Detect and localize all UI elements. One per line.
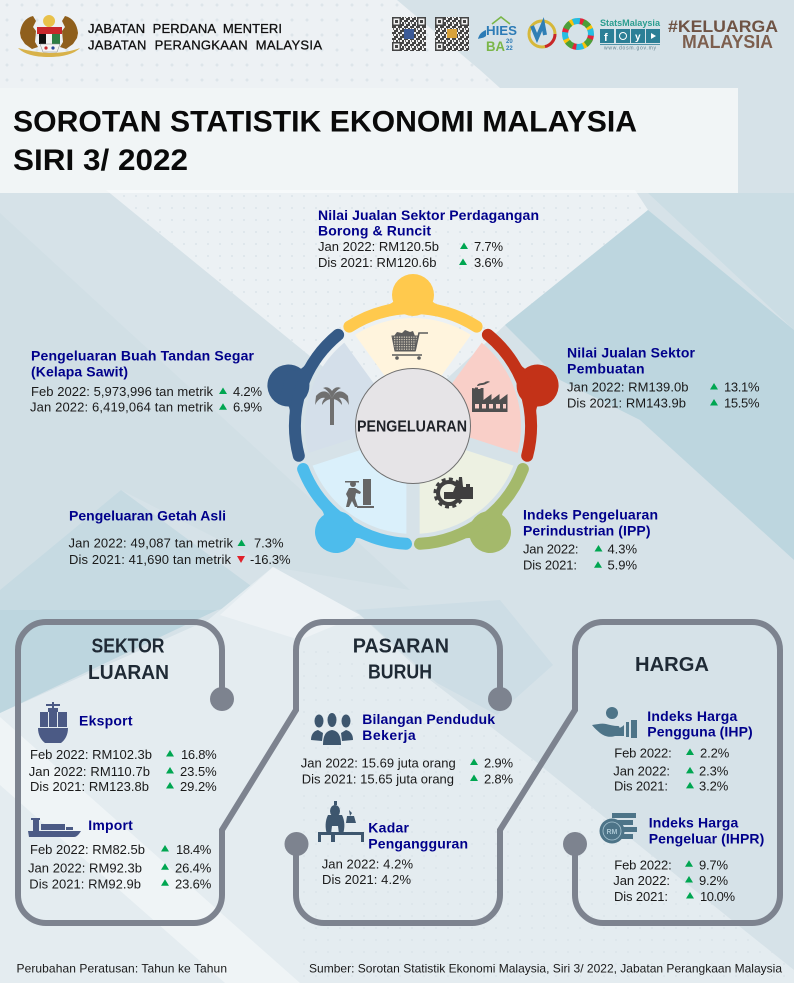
header organisation name: JABATAN PERDANA MENTERI: [88, 21, 282, 36]
text: penduduk bekerja: Dis 2021: 15.65 juta orang: [302, 771, 454, 786]
icon: rubber tapper: [345, 479, 374, 508]
stat: getah asli: 7.3%: [254, 536, 284, 550]
text: penduduk bekerja: [301, 711, 513, 786]
segment: kelapa sawit: [249, 319, 391, 473]
stat: getah asli: -16.3%: [250, 552, 291, 567]
icon: national crest: [18, 15, 80, 57]
text: penduduk bekerja: 2.9%: [484, 755, 513, 770]
stat: IPP: Jan 2022:: [523, 542, 578, 556]
text: eksport: 16.8%: [181, 747, 217, 762]
text: IHP: 3.2%: [699, 779, 729, 794]
icon: coin stack: RM: [606, 829, 618, 836]
stat: kelapa sawit: [30, 348, 262, 415]
heading: harga: HARGA: [635, 654, 709, 676]
icon: export ship: [38, 702, 68, 743]
stat: IPP: Perindustrian (IPP): [523, 522, 650, 538]
segment: IPP: [387, 424, 554, 586]
logo: HIES BA 2022: [478, 17, 517, 54]
logo: StatsMalaysia social: [600, 18, 661, 52]
heading: sektor luaran: [88, 636, 169, 684]
text: IHP: Jan 2022:: [613, 764, 670, 779]
icon: unemployed person: [318, 801, 364, 842]
text: import: Import: [88, 817, 133, 833]
centre circle: PENGELUARAN: [357, 418, 467, 436]
text: eksport: 29.2%: [180, 779, 217, 794]
stat: pembuatan: Dis 2021: RM143.9b: [567, 396, 686, 410]
icon: hand with coin: [592, 707, 637, 738]
text: import: 26.4%: [175, 860, 212, 875]
wheel chart: pengeluaran: [249, 274, 577, 586]
connector outline: pasaran buruh to harga: [284, 622, 780, 923]
logo: HIES BA 2022: HIES: [486, 23, 517, 38]
stat: borong dan runcit: Jan 2022: RM120.5b: [318, 239, 439, 254]
stat: IPP: Dis 2021:: [523, 558, 577, 573]
text: import: 18.4%: [176, 842, 212, 857]
stat: IPP: 4.3%: [608, 542, 637, 556]
heading: pasaran buruh: [353, 636, 449, 684]
stat: getah asli: Dis 2021: 41,690 tan metrik: [69, 552, 232, 567]
text: penduduk bekerja: Bekerja: [362, 727, 416, 743]
logo: StatsMalaysia social: f: [604, 32, 608, 44]
text: penduduk bekerja: Jan 2022: 15.69 juta orang: [301, 755, 456, 770]
qr code: website: [435, 17, 469, 51]
text: IHPR: Dis 2021:: [614, 889, 668, 904]
text: import: 23.6%: [175, 876, 212, 891]
logo: SDG wheel: [565, 21, 591, 47]
stat: IPP: 5.9%: [608, 558, 637, 573]
text: import: [28, 817, 212, 891]
logo: HIES BA 2022: BA: [486, 38, 505, 54]
title text: [13, 106, 637, 177]
text: eksport: [29, 713, 217, 794]
logo: HIES BA 2022: 20: [506, 39, 513, 45]
icon: palm tree: [315, 387, 349, 425]
title band: [0, 88, 738, 193]
title text: SIRI 3/ 2022: [13, 144, 188, 177]
stat: pembuatan: [567, 344, 760, 410]
stat: borong dan runcit: [318, 207, 539, 270]
text: kadar pengangguran: Pengangguran: [368, 835, 468, 851]
stat: pembuatan: 13.1%: [724, 380, 760, 394]
stat: kelapa sawit: Jan 2022: 6,419,064 tan metrik: [30, 400, 214, 415]
stat: pembuatan: 15.5%: [724, 396, 760, 410]
logo: StatsMalaysia social: y: [635, 32, 641, 43]
text: IHPR: Feb 2022:: [614, 857, 672, 872]
stat: pembuatan: Pembuatan: [567, 360, 644, 376]
text: import: Jan 2022: RM92.3b: [28, 860, 142, 875]
text: IHP: 2.2%: [700, 745, 730, 760]
connector outline: sektor luaran to pasaran buruh: [18, 622, 512, 923]
icon: coin stack: [600, 813, 637, 844]
stat: getah asli: Jan 2022: 49,087 tan metrik: [68, 536, 234, 550]
stat: IPP: Indeks Pengeluaran: [523, 506, 658, 522]
text: kadar pengangguran: Jan 2022: 4.2%: [322, 856, 413, 871]
text: IHP: Dis 2021:: [614, 779, 668, 794]
logo: keluarga malaysia hashtag: MALAYSIA: [682, 32, 773, 52]
icon: import ship: [28, 818, 81, 837]
text: IHP: 2.3%: [699, 764, 729, 779]
logo: StatsMalaysia social: StatsMalaysia: [600, 18, 661, 28]
segment: getah asli: [272, 424, 439, 586]
text: eksport: Eksport: [79, 713, 133, 729]
text: IHP: [613, 708, 753, 794]
stat: borong dan runcit: 7.7%: [474, 239, 503, 254]
text: kadar pengangguran: [322, 819, 468, 887]
heading: sektor luaran: SEKTOR: [92, 636, 165, 658]
icon: factory: [472, 381, 508, 412]
text: IHPR: Jan 2022:: [613, 873, 670, 888]
text: IHPR: Pengeluar (IHPR): [649, 831, 764, 847]
header organisation name: JABATAN PERANGKAAN MALAYSIA: [88, 38, 322, 52]
panel: harga: [592, 654, 764, 904]
text: eksport: Feb 2022: RM102.3b: [30, 747, 152, 762]
text: IHPR: 9.2%: [699, 873, 728, 888]
stat: pembuatan: Jan 2022: RM139.0b: [567, 380, 688, 394]
heading: sektor luaran: LUARAN: [88, 662, 169, 684]
text: import: Dis 2021: RM92.9b: [29, 876, 141, 891]
qr code: facebook: [392, 17, 426, 51]
segment: borong dan runcit: [349, 274, 477, 382]
text: eksport: Dis 2021: RM123.8b: [30, 779, 149, 794]
text: IHPR: 9.7%: [699, 857, 728, 872]
icon: workers: [311, 713, 353, 745]
text: kadar pengangguran: Kadar: [368, 819, 410, 835]
logo: HIES BA 2022: 22: [506, 46, 513, 52]
logo: keluarga malaysia hashtag: [668, 17, 778, 52]
stat: kelapa sawit: Feb 2022: 5,973,996 tan metrik: [31, 384, 214, 399]
text: IHP: Pengguna (IHP): [647, 724, 753, 740]
text: eksport: 23.5%: [180, 764, 217, 779]
footnote: source: Sumber: Sorotan Statistik Ekonomi Malaysia, Siri 3/ 2022, Jabatan Perangkaan Malaysia: [309, 961, 782, 975]
text: kadar pengangguran: Dis 2021: 4.2%: [322, 872, 411, 887]
text: IHP: Indeks Harga: [647, 708, 738, 724]
stat: borong dan runcit: 3.6%: [474, 255, 503, 270]
panel: pasaran buruh: [301, 636, 513, 887]
stat: kelapa sawit: Pengeluaran Buah Tandan Segar: [31, 348, 255, 364]
text: IHPR: Indeks Harga: [649, 815, 739, 831]
logo: StatsMalaysia social: www.dosm.gov.my: [604, 46, 656, 52]
text: penduduk bekerja: 2.8%: [484, 771, 513, 786]
text: penduduk bekerja: Bilangan Penduduk: [362, 711, 495, 727]
heading: pasaran buruh: PASARAN: [353, 636, 449, 658]
panel: sektor luaran: [28, 636, 217, 891]
logo: census ring: [529, 21, 555, 47]
centre circle: [356, 368, 470, 484]
stat: borong dan runcit: Nilai Jualan Sektor Perdagangan: [318, 207, 539, 223]
footnote: percentage change: Perubahan Peratusan: Tahun ke Tahun: [16, 961, 227, 975]
stat: getah asli: [68, 508, 291, 567]
icon: shopping cart: [392, 330, 428, 360]
stat: borong dan runcit: Dis 2021: RM120.6b: [318, 255, 436, 270]
stat: borong dan runcit: Borong & Runcit: [318, 222, 431, 238]
segment: pembuatan: [435, 319, 577, 473]
text: IHPR: [613, 815, 764, 904]
stat: IPP: [523, 506, 658, 573]
logo: keluarga malaysia hashtag: #KELUARGA: [668, 17, 778, 36]
text: eksport: Jan 2022: RM110.7b: [29, 764, 150, 779]
heading: pasaran buruh: BURUH: [368, 662, 432, 684]
stat: kelapa sawit: (Kelapa Sawit): [31, 364, 128, 380]
stat: getah asli: Pengeluaran Getah Asli: [69, 508, 226, 524]
text: import: Feb 2022: RM82.5b: [30, 842, 145, 857]
stat: kelapa sawit: 4.2%: [233, 384, 262, 399]
stat: kelapa sawit: 6.9%: [233, 400, 262, 415]
icon: industrial gear: [435, 477, 473, 507]
header organisation name: [88, 21, 322, 52]
text: IHP: Feb 2022:: [614, 745, 672, 760]
text: IHPR: 10.0%: [700, 889, 735, 904]
title text: SOROTAN STATISTIK EKONOMI MALAYSIA: [13, 106, 637, 138]
stat: pembuatan: Nilai Jualan Sektor: [567, 344, 696, 360]
